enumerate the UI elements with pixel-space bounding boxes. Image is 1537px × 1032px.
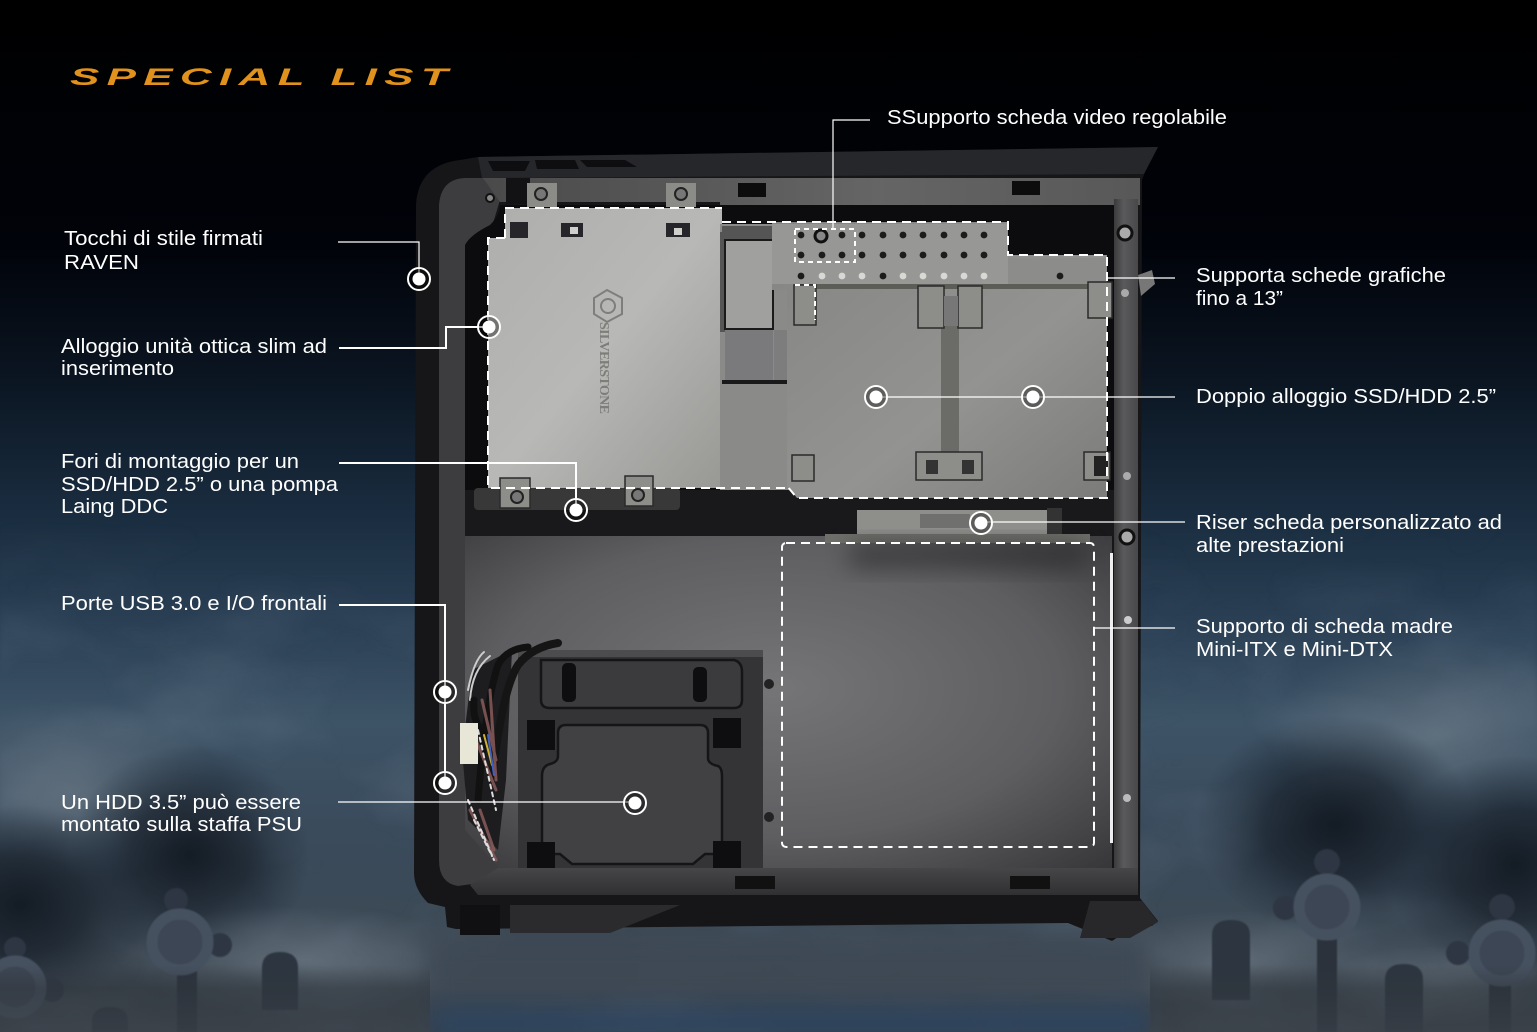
drive clips bbox=[792, 282, 1112, 481]
left inner frame bbox=[439, 178, 500, 886]
top vent band bbox=[478, 147, 1158, 178]
white molex connector bbox=[460, 723, 478, 764]
right plate dashed outline bbox=[722, 222, 1107, 498]
upper shadow gap bbox=[465, 490, 1115, 536]
left drive plate bbox=[488, 208, 722, 488]
callout: 3.5 inch HDD: Un HDD 3.5” può essere bbox=[61, 792, 301, 814]
callout: graphics card length: fino a 13” bbox=[1196, 288, 1283, 310]
PSU bracket bbox=[518, 650, 774, 870]
case outer shell bbox=[414, 147, 1158, 941]
callout: dual 2.5 inch bays: Doppio alloggio SSD/HDD 2.5” bbox=[1196, 386, 1496, 408]
left plate dashed outline bbox=[488, 208, 790, 488]
base and feet bbox=[458, 896, 1158, 938]
callout: RAVEN styling: Tocchi di stile firmati bbox=[64, 228, 263, 250]
callout: mounting holes bbox=[61, 451, 587, 521]
callout: mounting holes: Fori di montaggio per un bbox=[61, 451, 299, 473]
graphics bracket dashed outline bbox=[795, 229, 855, 262]
graveyard: tombstones and crosses bbox=[0, 849, 1530, 1032]
left plate slots bbox=[510, 222, 690, 238]
callout: riser card: alte prestazioni bbox=[1196, 535, 1344, 557]
lower clips bbox=[500, 476, 653, 508]
lower rail under left plate bbox=[474, 488, 680, 510]
middle dark slot bbox=[720, 226, 774, 332]
callout: mounting holes: SSD/HDD 2.5” o una pompa bbox=[61, 474, 339, 496]
callout: slim optical drive bay: inserimento bbox=[61, 358, 174, 380]
callout: slim optical drive bay: Alloggio unità ottica slim ad bbox=[61, 336, 327, 358]
callout: front USB and I/O bbox=[61, 593, 456, 794]
middle lower panels bbox=[722, 330, 796, 384]
top bar bracket cut-out bbox=[506, 178, 530, 204]
lower chamber wall bbox=[465, 535, 1112, 875]
callout: graphics card length bbox=[1107, 265, 1446, 310]
interior void bbox=[465, 205, 1115, 535]
floor with case reflection bbox=[425, 935, 1150, 1032]
callout: motherboard support: Mini-ITX e Mini-DTX bbox=[1196, 639, 1393, 661]
top screws bbox=[486, 183, 696, 207]
SilverStone logo bbox=[594, 290, 622, 414]
top bar slots bbox=[738, 181, 1040, 197]
callout: RAVEN styling: RAVEN bbox=[64, 252, 139, 274]
cross right two bbox=[1446, 894, 1530, 1032]
middle drive section bbox=[720, 224, 796, 490]
hole strip bbox=[772, 224, 1107, 289]
callout: slim optical drive bay bbox=[61, 316, 500, 380]
bottom bar slots bbox=[735, 876, 1050, 889]
cable bundle bbox=[462, 643, 558, 860]
tombstones bbox=[92, 920, 1423, 1032]
callout: adjustable video card support: SSupporto scheda video regolabile bbox=[887, 107, 1227, 129]
title: SPECIAL LIST bbox=[70, 64, 455, 91]
callout: graphics card length: Supporta schede grafiche bbox=[1196, 265, 1446, 287]
callout: motherboard support: Supporto di scheda madre bbox=[1196, 616, 1453, 638]
SilverStone logo: SILVERSTONE bbox=[596, 322, 611, 414]
top metal bar bbox=[483, 178, 1140, 205]
motherboard dashed outline bbox=[782, 543, 1094, 847]
cross right one bbox=[1273, 849, 1355, 1032]
pillar screws bbox=[1110, 226, 1155, 843]
right drive plate bbox=[772, 222, 1107, 498]
center rail bbox=[941, 300, 959, 465]
middle slot panel bbox=[725, 240, 773, 329]
small bracket dashed outline bbox=[795, 285, 815, 320]
callout: front USB and I/O: Porte USB 3.0 e I/O frontali bbox=[61, 593, 327, 615]
ground haze bbox=[0, 965, 1537, 1032]
bottom bar bbox=[470, 868, 1138, 895]
callout: motherboard support bbox=[1094, 616, 1453, 661]
callout: dual 2.5 inch bays bbox=[865, 386, 1496, 408]
callout: 3.5 inch HDD bbox=[61, 792, 646, 836]
right pillar bbox=[1114, 199, 1138, 871]
callout: riser card bbox=[970, 512, 1502, 557]
callout: RAVEN styling bbox=[64, 228, 430, 290]
callout: 3.5 inch HDD: montato sulla staffa PSU bbox=[61, 814, 302, 836]
callout: riser card: Riser scheda personalizzato ad bbox=[1196, 512, 1502, 534]
cross left two bbox=[0, 937, 64, 1013]
riser card bbox=[825, 508, 1090, 568]
top vent slits bbox=[488, 160, 637, 171]
cross left one bbox=[152, 888, 232, 1032]
PC case cutaway bbox=[414, 147, 1158, 941]
callout: adjustable video card support bbox=[833, 107, 1227, 229]
callout: mounting holes: Laing DDC bbox=[61, 496, 168, 518]
